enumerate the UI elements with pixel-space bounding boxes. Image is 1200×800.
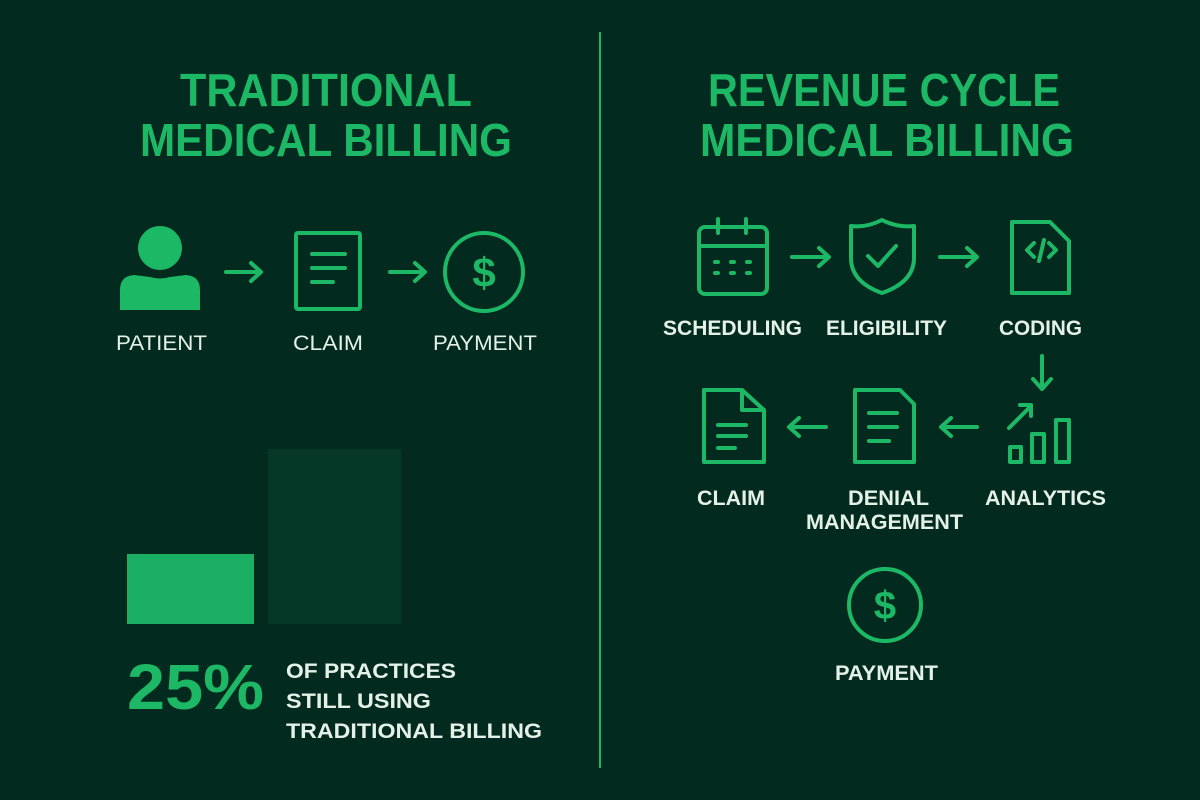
revenue cycle flow: CODING	[999, 317, 1082, 340]
icon: payment: $	[874, 584, 896, 628]
title: revenue cycle medical billing	[700, 64, 1074, 166]
title: traditional medical billing: TRADITIONAL	[180, 64, 472, 116]
traditional flow: CLAIM	[293, 332, 363, 355]
icon: analytics	[1009, 405, 1069, 462]
icon: claim document	[296, 233, 360, 309]
stat: 25%	[127, 651, 542, 743]
labels row 1: SCHEDULING	[663, 317, 802, 340]
arrow down	[1033, 356, 1051, 389]
arrow	[390, 263, 425, 281]
traditional flow: PAYMENT	[433, 332, 537, 355]
bar chart	[127, 449, 401, 624]
icon: code document	[1012, 222, 1069, 293]
revenue cycle flow: MANAGEMENT	[806, 511, 963, 534]
icon: payment: $	[472, 249, 496, 296]
labels: PATIENT	[116, 332, 207, 355]
revenue cycle flow	[663, 219, 1106, 685]
arrow	[940, 248, 977, 266]
arrow	[792, 248, 829, 266]
icon: claim document	[704, 390, 764, 462]
icon: payment	[445, 233, 523, 311]
title: revenue cycle medical billing: MEDICAL BILLING	[700, 114, 1074, 166]
stat: 25%: 25%	[127, 651, 264, 723]
revenue cycle flow: DENIAL	[848, 487, 929, 510]
title: traditional medical billing	[140, 64, 512, 166]
traditional flow	[116, 226, 537, 355]
stat: 25%: STILL USING	[286, 690, 431, 713]
title: revenue cycle medical billing: REVENUE CYCLE	[708, 64, 1060, 116]
revenue cycle flow: ELIGIBILITY	[826, 317, 947, 340]
revenue cycle flow: ANALYTICS	[985, 487, 1106, 510]
icon: calendar	[699, 219, 767, 294]
revenue cycle flow: PAYMENT	[835, 662, 938, 685]
stat: 25%: TRADITIONAL BILLING	[286, 720, 542, 743]
icon: payment	[849, 569, 921, 641]
arrow	[226, 263, 261, 281]
labels row 2: CLAIM	[697, 487, 765, 510]
icon: denial document	[855, 390, 914, 462]
arrow left	[789, 418, 826, 436]
icon: patient	[120, 226, 200, 310]
stat: 25%: OF PRACTICES	[286, 660, 456, 683]
arrow left	[941, 418, 977, 436]
title: traditional medical billing: MEDICAL BILLING	[140, 114, 512, 166]
icon: shield	[851, 220, 914, 293]
